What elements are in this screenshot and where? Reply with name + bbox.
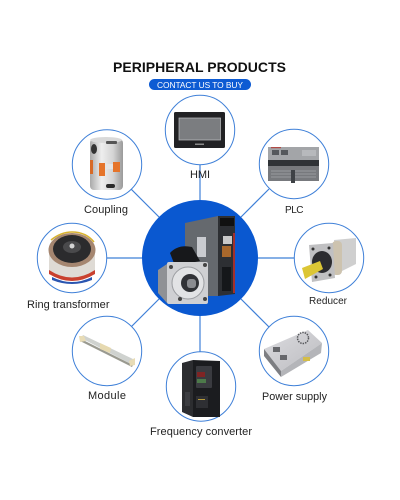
label: Frequency converter: Frequency converter [150, 426, 252, 438]
label: Reducer: Reducer [309, 296, 348, 307]
label: Ring transformer: Ring transformer [27, 299, 110, 311]
product: frequency converter [166, 352, 236, 421]
central product: servo motor and drive [142, 200, 258, 316]
contact button: CONTACT US TO BUY [157, 80, 243, 90]
product: linear module [72, 316, 142, 386]
label: PLC: PLC [285, 205, 304, 216]
title: PERIPHERAL PRODUCTS [113, 59, 286, 75]
label: HMI: HMI [190, 169, 210, 181]
label: Module: Module [88, 390, 126, 402]
product: power supply [259, 316, 329, 386]
product: HMI [165, 95, 235, 165]
label: Power supply: Power supply [262, 391, 328, 403]
product: reducer [294, 223, 364, 293]
product: PLC [259, 129, 329, 199]
label: Coupling: Coupling [84, 204, 128, 216]
product: ring transformer [37, 223, 107, 293]
product: coupling [72, 130, 142, 199]
